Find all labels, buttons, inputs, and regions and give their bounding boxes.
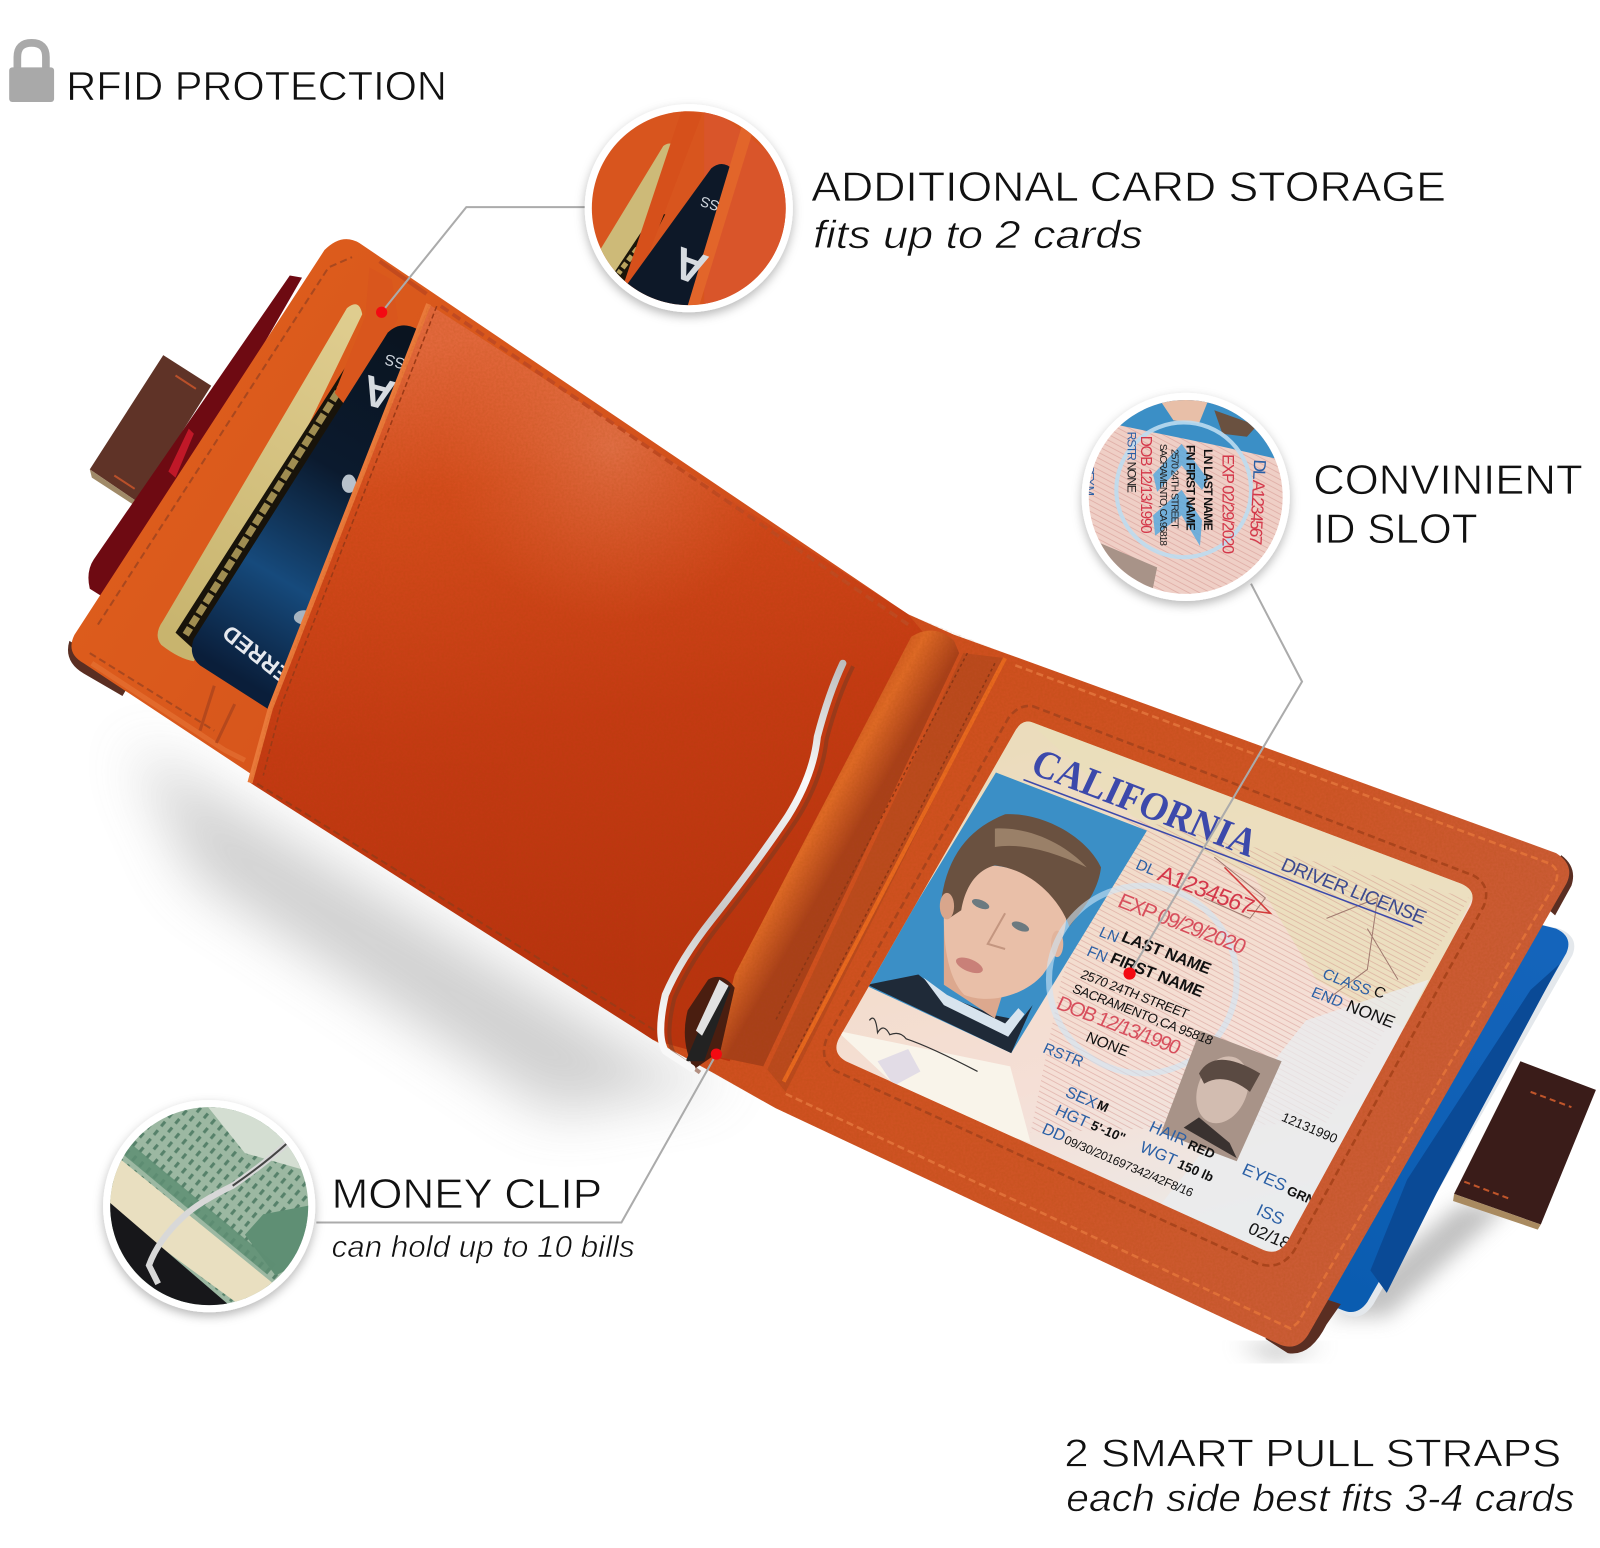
ID text: SEX [1063, 1083, 1100, 1112]
inset circle: id slot [1082, 393, 1291, 612]
wallet body: leather [71, 239, 1569, 1347]
ID text: RED [1185, 1137, 1218, 1162]
label: smart pull straps [1064, 1432, 1575, 1519]
ID text: NONE [1343, 996, 1398, 1032]
inset circle: card storage [582, 102, 796, 316]
left pull strap [90, 355, 211, 506]
ID text: 09/30/201697342/42F8/16 [1062, 1133, 1196, 1200]
label: convinient id slot [1313, 456, 1583, 552]
leather grain overlay [245, 296, 1582, 1357]
inset circle: id slot: LN LAST NAME [1201, 449, 1215, 531]
ID text: ISS [1253, 1200, 1288, 1229]
ID text: DL [1133, 857, 1158, 879]
ID text: DOB 12/13/1990 [1053, 993, 1184, 1059]
card lettering: FERRED [218, 620, 307, 697]
card slot: dark blue card [192, 325, 429, 720]
ID text: FIRST NAME [1107, 950, 1207, 1001]
label: additional card storage [811, 163, 1446, 257]
RFID lock icon [9, 43, 54, 102]
card lettering [218, 350, 407, 697]
red card behind wallet [88, 276, 302, 604]
wallet body: brown back edges [68, 641, 1573, 1354]
card slot: gold card [158, 304, 380, 661]
ID text: CALIFORNIA [1025, 740, 1265, 866]
hologram ring [1049, 886, 1237, 1073]
ID text: NONE [1083, 1029, 1131, 1060]
inset circle: card storage: SS [699, 192, 722, 213]
label: money clip: MONEY CLIP [332, 1170, 602, 1217]
card lettering: A [357, 365, 400, 419]
ID text: 150 lb [1175, 1157, 1216, 1185]
ID text: C [1371, 983, 1388, 1002]
ID text: M [1095, 1097, 1111, 1115]
ID text: LN [1096, 924, 1122, 946]
label: money clip: can hold up to 10 bills [332, 1230, 635, 1264]
ID text: FN [1084, 943, 1110, 966]
card lettering: SS [383, 350, 407, 372]
RFID heading: RFID PROTECTION [66, 63, 447, 109]
photo [866, 772, 1147, 1053]
cast shadow under wallet [133, 745, 1510, 1359]
ID text [1023, 740, 1429, 1253]
hinge strap [714, 631, 1005, 1092]
blue card, right side [1322, 923, 1574, 1317]
label: convinient id slot: CONVINIENT [1313, 456, 1583, 503]
ID text: SACRAMENTO,CA 95818 [1070, 981, 1216, 1048]
ID text: DD [1039, 1120, 1068, 1145]
ID text: 2570 24TH STREET [1078, 967, 1191, 1021]
ID text: 02/18 [1245, 1218, 1294, 1253]
inset circle: id slot: RSTR NONE [1125, 432, 1139, 493]
label: convinient id slot: ID SLOT [1313, 505, 1478, 552]
card slot: leather seam between cards [335, 267, 398, 412]
callout line: additional card storage [376, 207, 587, 318]
signature [869, 1018, 978, 1071]
ID text: EXP 09/29/2020 [1114, 889, 1250, 959]
ID text: WGT [1137, 1138, 1180, 1170]
label: money clip [332, 1170, 635, 1264]
money clip [661, 663, 853, 1072]
ID window [836, 722, 1473, 1252]
right pull strap [1453, 1061, 1596, 1230]
ID window stitching [824, 706, 1486, 1266]
ID text: RSTR [1040, 1040, 1086, 1071]
inset circle: id slot: FN FIRST NAME [1184, 445, 1198, 531]
inset circle: id slot: DOB 12/13/1990 [1137, 436, 1154, 534]
ID text: HAIR [1146, 1118, 1190, 1149]
ID text: CLASS [1320, 966, 1374, 999]
label: smart pull straps: each side best fits 3-4 cards [1066, 1477, 1575, 1519]
inset circle: money clip [92, 1100, 316, 1327]
callout line: money clip [316, 1048, 722, 1222]
callout line: id slot [1123, 584, 1302, 980]
ID text: DRIVER LICENSE [1277, 855, 1429, 929]
inset circle: id slot: SACRAMENTO, CA 95818 [1157, 444, 1168, 546]
inset circle: id slot: SEX M [1083, 465, 1097, 496]
ID text: LAST NAME [1119, 928, 1214, 978]
label: additional card storage: ADDITIONAL CARD STORAGE [811, 163, 1446, 210]
ID text: END [1309, 984, 1346, 1011]
top seam stitching [380, 261, 427, 294]
ghost portrait [1161, 1031, 1282, 1161]
ID text: GRN [1284, 1183, 1318, 1208]
label: additional card storage: fits up to 2 cards [813, 214, 1143, 257]
inset circle: id slot: DL A1234567 [1246, 459, 1270, 546]
ID text: HGT [1052, 1102, 1092, 1131]
ID text: EYES [1239, 1159, 1290, 1195]
front pocket [250, 304, 923, 1061]
ID text: 5'-10" [1089, 1118, 1128, 1145]
outer stitching right panel [786, 665, 1557, 1329]
inset circle: id slot: 2570 24TH STREET [1168, 449, 1179, 529]
ID text: A1234567 [1154, 861, 1258, 920]
label: smart pull straps: 2 SMART PULL STRAPS [1064, 1432, 1561, 1475]
ID text: 12131990 [1279, 1110, 1340, 1146]
inset circle: id slot: EXP 02/29/2020 [1218, 454, 1236, 554]
inner flap highlights and stitching [90, 257, 352, 760]
inset circle: card storage: A [666, 237, 714, 296]
map linework [1204, 857, 1398, 1000]
